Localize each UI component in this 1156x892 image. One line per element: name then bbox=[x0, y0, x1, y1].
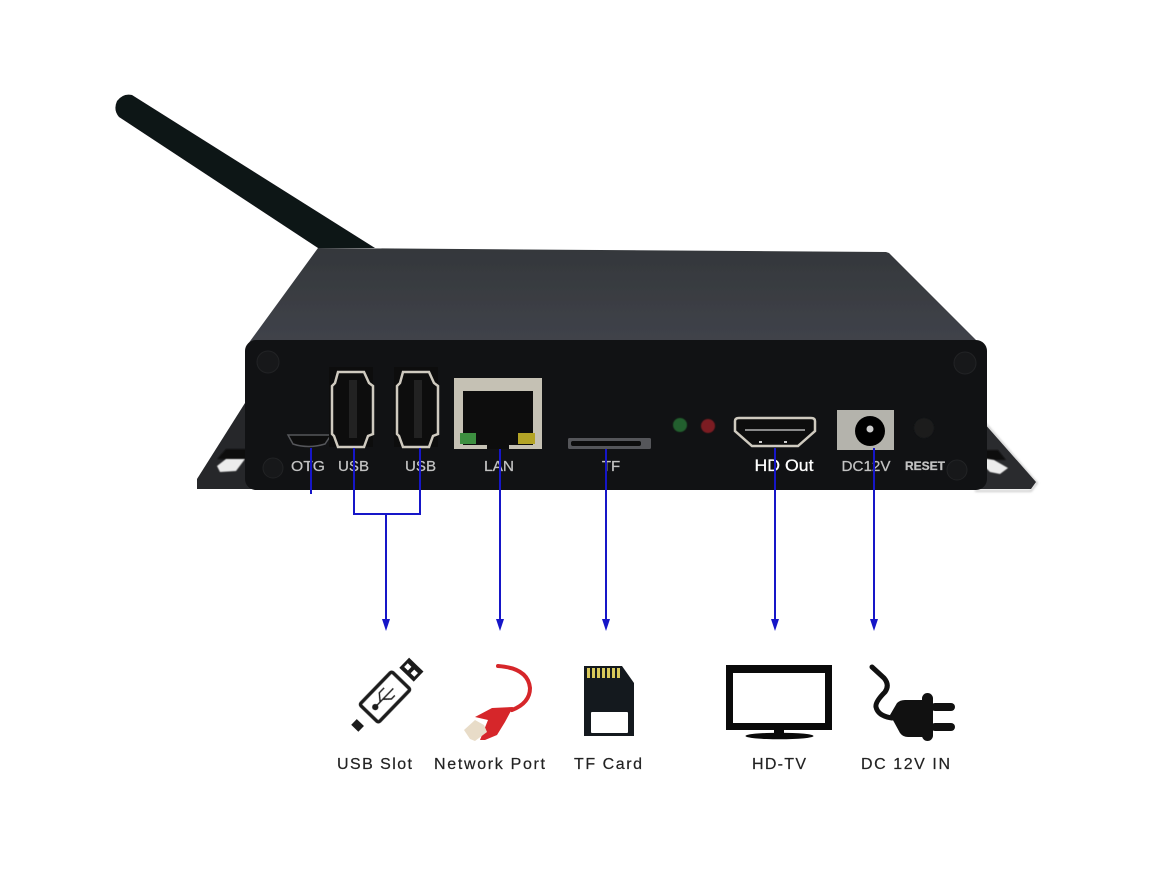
port labels: OTG bbox=[291, 458, 325, 475]
icon: TF card bbox=[584, 666, 634, 736]
antenna bbox=[115, 95, 375, 248]
port labels: TF bbox=[602, 458, 620, 475]
connector lines and arrows bbox=[311, 448, 878, 631]
USB port 1 bbox=[329, 367, 373, 447]
port labels bbox=[291, 457, 946, 475]
port labels: LAN bbox=[484, 458, 514, 475]
port labels: USB bbox=[338, 458, 369, 475]
OTG line bbox=[310, 448, 312, 494]
left mounting flange bbox=[197, 403, 252, 491]
LAN port bbox=[454, 378, 542, 449]
right mounting flange bbox=[975, 423, 1037, 491]
TF arrow bbox=[602, 449, 610, 631]
icon captions bbox=[337, 756, 950, 773]
TF slot bbox=[568, 438, 651, 449]
icon captions: HD-TV bbox=[752, 756, 806, 773]
DC arrow bbox=[870, 448, 878, 631]
icon captions: DC 12V IN bbox=[861, 756, 950, 773]
corner screws bbox=[257, 351, 976, 480]
icon captions: Network Port bbox=[434, 756, 546, 773]
USB bracket with arrow bbox=[354, 448, 420, 631]
LED red bbox=[701, 419, 715, 433]
icon: network cable bbox=[464, 666, 530, 741]
OTG port bbox=[288, 435, 331, 446]
HDMI contact strip bbox=[745, 429, 805, 443]
LED green bbox=[673, 418, 687, 432]
port labels: DC12V bbox=[842, 458, 890, 475]
top cover bbox=[248, 248, 978, 344]
DC jack bbox=[837, 410, 894, 450]
icon: DC power plug bbox=[872, 667, 955, 741]
icon captions: TF Card bbox=[574, 756, 642, 773]
icon: USB stick bbox=[345, 656, 426, 737]
port labels: RESET bbox=[905, 459, 946, 473]
reset button bbox=[914, 418, 934, 438]
device: media player box bbox=[197, 248, 1037, 491]
HDMI port bbox=[735, 418, 815, 446]
port labels: HD Out bbox=[754, 457, 814, 475]
LAN arrow bbox=[496, 449, 504, 631]
USB port 2 bbox=[394, 367, 438, 447]
HD arrow bbox=[771, 448, 779, 631]
port labels: USB bbox=[405, 458, 436, 475]
icon captions: USB Slot bbox=[337, 756, 413, 773]
icon: HD TV bbox=[726, 665, 832, 739]
front panel bbox=[245, 340, 987, 490]
